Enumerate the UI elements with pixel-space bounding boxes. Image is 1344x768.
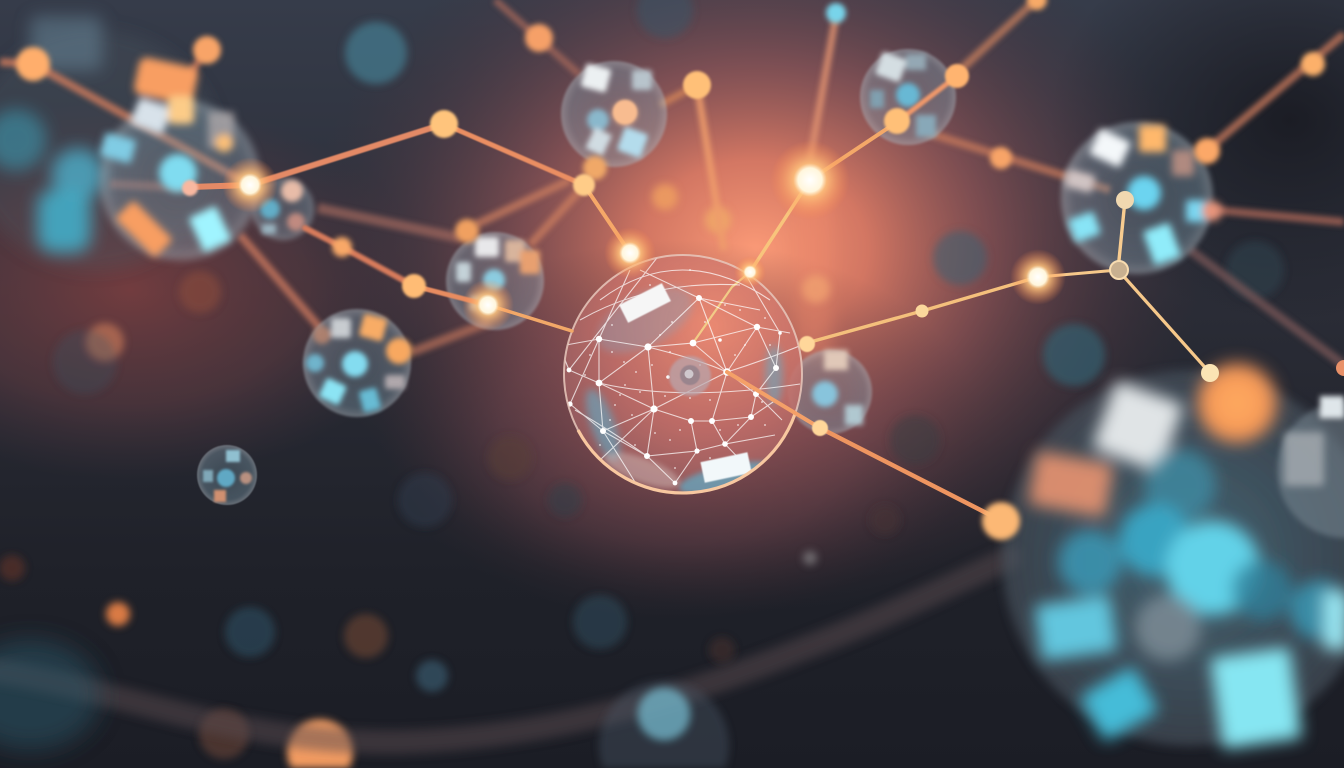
line: sphere to lower right (727, 372, 820, 428)
vertical glow band (796, 190, 832, 360)
geodesic lines (565, 254, 802, 490)
bubble: lower left (303, 309, 412, 417)
right top dark shade (1050, 0, 1344, 320)
bubble: tiny (197, 445, 257, 505)
sphere reflections (595, 285, 695, 356)
central glow (305, 0, 1205, 610)
bubble: left large (99, 56, 260, 260)
line: upper left chain (250, 124, 444, 185)
network nodes (16, 0, 1344, 540)
small glass bubbles (99, 49, 1222, 505)
bubble: small by left hub (252, 178, 314, 240)
left red haze (0, 100, 430, 480)
sphere highlights (619, 283, 671, 323)
sphere particles (567, 295, 782, 485)
connection lines (190, 76, 1210, 520)
blurred bubble, bottom left (0, 640, 100, 750)
bubble: top right of centre (860, 49, 956, 145)
lower sphere glow (380, 240, 980, 620)
right bubble inner block (1284, 432, 1324, 486)
glowing hubs (222, 157, 278, 213)
bubble: beside left of sphere (446, 232, 544, 330)
line: right chain (803, 277, 1038, 344)
bubble: right (1061, 122, 1222, 274)
small crisp nodes (916, 304, 928, 318)
large blurred bubble, bottom right (1002, 362, 1344, 749)
yellow inner link (694, 276, 746, 341)
blurred background links (0, 0, 1344, 365)
line: lower left chain (305, 228, 414, 286)
line: top right chain (750, 180, 810, 272)
bubble: top centre (561, 61, 667, 167)
blurred lower-curve strands (0, 558, 1010, 742)
blurred bubble, far left (0, 16, 220, 270)
sphere centre reflection (669, 356, 711, 396)
sphere rim (564, 255, 802, 493)
central sphere (564, 254, 802, 501)
bubble: right of sphere (788, 350, 872, 434)
blurred bubble, bottom centre (599, 681, 729, 768)
